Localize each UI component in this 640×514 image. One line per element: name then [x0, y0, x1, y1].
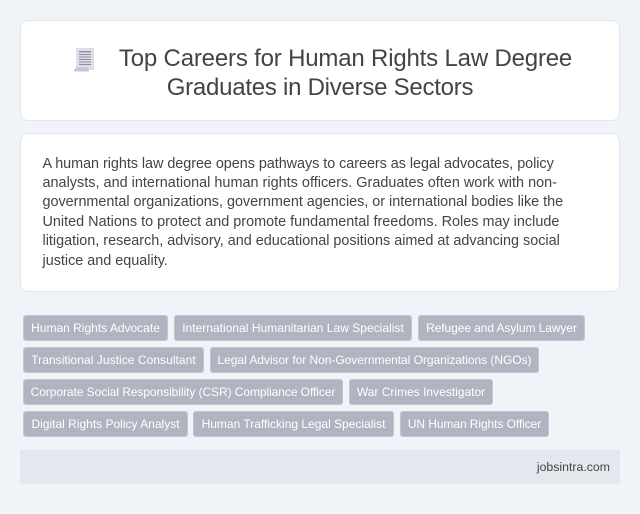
- title: Top Careers for Human Rights Law Degree: [119, 45, 572, 72]
- description text: [42, 156, 563, 268]
- tag: [349, 379, 493, 405]
- description panel: [20, 133, 620, 292]
- tag: Corporate Social Responsibility (CSR) Compliance Officer: [31, 385, 335, 399]
- description text: justice and equality.: [42, 252, 168, 268]
- tag: UN Human Rights Officer: [408, 417, 541, 431]
- description text: analysts, and international human rights officers. Graduates often work with non-: [42, 174, 557, 190]
- tag: [400, 411, 549, 437]
- header panel: [20, 20, 620, 121]
- description text: litigation, research, advisory, and educational positions aimed at advancing social: [42, 233, 560, 249]
- tag: War Crimes Investigator: [357, 385, 485, 399]
- description text: A human rights law degree opens pathways to careers as legal advocates, policy: [42, 156, 554, 172]
- tag: [418, 315, 585, 341]
- tag: Human Rights Advocate: [31, 321, 160, 335]
- tag: Human Trafficking Legal Specialist: [202, 417, 385, 431]
- tag: [193, 411, 394, 437]
- tag: [174, 315, 412, 341]
- tag: [23, 347, 204, 373]
- tag: Digital Rights Policy Analyst: [31, 417, 180, 431]
- tag: [23, 379, 343, 405]
- tag: [23, 411, 188, 437]
- title: Graduates in Diverse Sectors: [167, 74, 473, 101]
- career tags: [23, 315, 585, 437]
- description text: United Nations to protect and promote fundamental freedoms. Roles may include: [42, 214, 559, 230]
- icon: document scroll: [74, 48, 94, 72]
- tag: International Humanitarian Law Specialist: [182, 321, 404, 335]
- description text: governmental organizations, government agencies, or international bodies like the: [42, 194, 563, 210]
- tag: Legal Advisor for Non-Governmental Organizations (NGOs): [218, 353, 531, 367]
- tag: Refugee and Asylum Lawyer: [426, 321, 577, 335]
- tag: [210, 347, 539, 373]
- title: [119, 45, 572, 101]
- tag: Transitional Justice Consultant: [31, 353, 196, 367]
- footer site name: jobsintra.com: [537, 460, 610, 474]
- tag: [23, 315, 168, 341]
- footer: [20, 450, 620, 484]
